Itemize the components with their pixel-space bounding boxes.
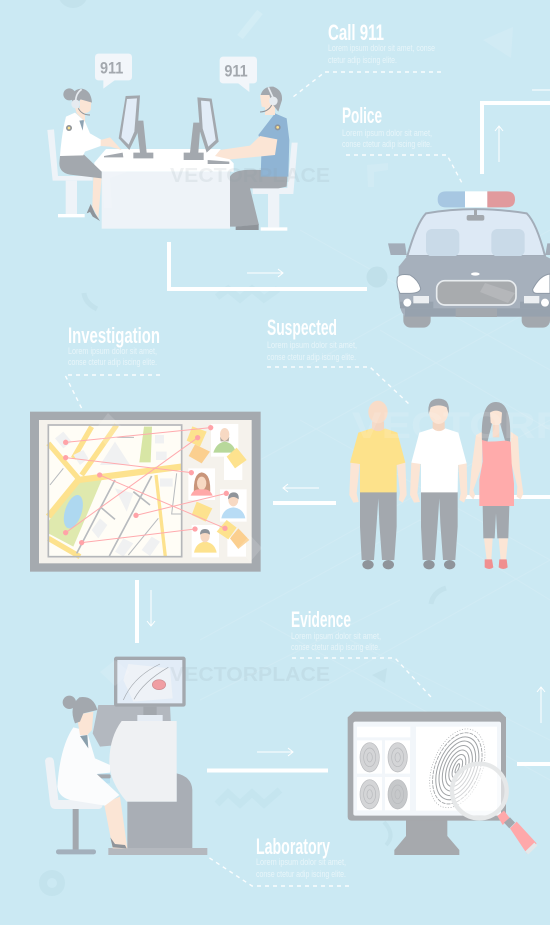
laboratory label [208,834,349,886]
connector: lab to evidence [207,768,328,772]
lab chair [45,757,103,854]
arrow: up [495,126,503,162]
evidence label: Evidence [291,607,351,632]
microscope machine [87,705,207,855]
scene: laboratory [45,657,207,855]
small fingerprints [360,743,407,809]
large fingerprint [419,721,496,816]
suspected label: Lorem ipsum dolor sit amet, [267,340,357,351]
call 911 label: Call 911 [328,20,384,45]
suspected label [267,315,409,404]
investigation label: Investigation [68,323,160,348]
female operator [59,88,122,221]
police label: Police [342,103,382,128]
evidence label: conse ctetur adip iscing elite. [291,642,380,653]
speech bubble left: 911 [100,58,123,77]
laboratory label: Laboratory [256,834,330,859]
watermark overlays: faint stock marks and shapes over the artwork [95,165,550,686]
suspected label: Suspected [267,315,337,340]
police label [342,103,462,183]
evidence label [291,607,431,697]
arrow: right to evidence [257,748,293,756]
lab monitor [114,657,186,707]
arrow: right to police car [247,269,283,277]
laboratory label: Lorem ipsum dolor sit amet, [256,857,346,868]
desk [94,149,234,229]
connector: dispatch to police [169,242,367,289]
monitor stand [394,820,459,855]
watermark overlays: faint stock marks and shapes over the artwork: VECTORPLACE [170,165,330,187]
arrow: up at right edge [537,687,545,723]
police label: Lorem ipsum dolor sit amet, [342,128,432,139]
scene: 911 dispatch desk [47,54,298,231]
call 911 label [293,20,441,97]
speech bubble left [95,54,132,89]
suspected label: conse ctetur adip iscing elite. [267,352,356,363]
speech bubble right [220,57,257,92]
watermark overlays: faint stock marks and shapes over the artwork: VECTORPL [352,405,550,446]
scientist [57,696,127,848]
monitor frame [348,712,506,821]
investigation label: Lorem ipsum dolor sit amet, [68,346,157,357]
right chair [253,143,298,231]
car body [388,209,550,328]
call 911 label: ctetur adip iscing elite. [328,55,397,66]
panel: investigation map board [30,412,261,572]
investigation label: conse ctetur adip iscing elite. [68,357,157,368]
investigation label [65,323,160,411]
male operator [215,87,289,230]
watermark overlays: faint stock marks and shapes over the artwork: VECTORPLACE [170,664,330,686]
arrow: left to map [283,484,319,492]
map [48,425,182,557]
connector: top right [482,103,550,174]
scene: police car [388,191,550,328]
light bar [438,191,515,207]
connector: suspects to investigation [273,501,336,505]
monitor left [104,95,153,158]
suspect 3: red dress [469,402,523,569]
call 911 label: Lorem ipsum dolor sit amet, conse [328,43,435,54]
speech bubble right: 911 [224,61,248,80]
suspect 2: white shirt [410,399,467,569]
evidence label: Lorem ipsum dolor sit amet, [291,631,381,642]
magnifying glass [452,764,537,854]
suspect photos [188,424,247,557]
screen [353,722,501,816]
red connection strings [63,425,229,545]
sticky notes [187,426,249,549]
connector: map to lab [135,580,139,643]
monitor right [184,97,229,164]
police label: conse ctetur adip iscing elite. [342,139,432,150]
scene: fingerprint monitor [348,712,537,855]
left chair [47,129,93,217]
suspect 1: yellow shirt [349,401,407,569]
scene: three suspects [349,399,523,569]
laboratory label: conse ctetur adip iscing elite. [256,869,346,880]
arrow: down [147,590,155,626]
